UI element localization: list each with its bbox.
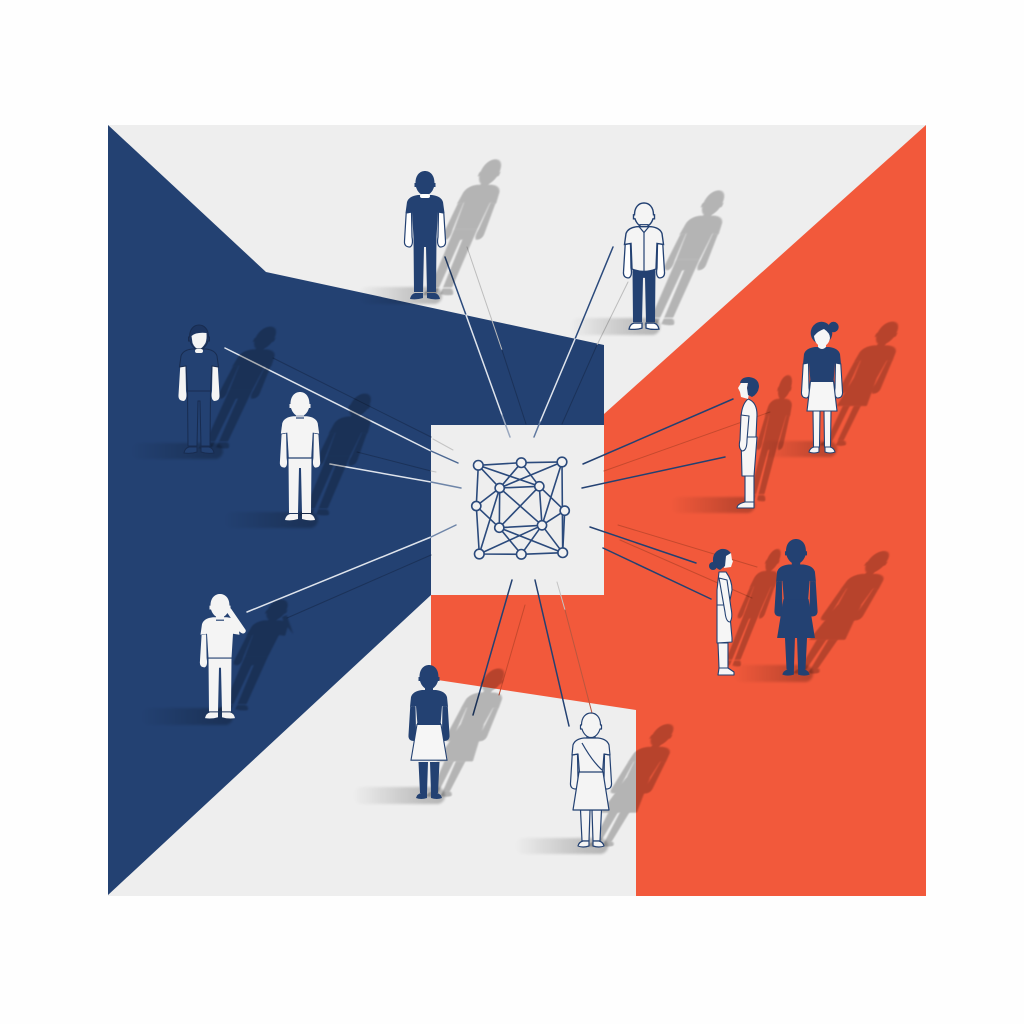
connection lines — [225, 247, 770, 726]
person — [570, 713, 612, 847]
figure: left upper man, navy on navy — [130, 325, 291, 459]
person — [279, 392, 321, 520]
cast shadow — [212, 600, 309, 710]
figure: bottom-right outlined woman — [515, 713, 689, 854]
panel: navy region — [108, 125, 604, 895]
figure: saluting white man — [140, 594, 309, 725]
cast shadow — [742, 375, 801, 501]
cast shadow — [638, 190, 739, 325]
cast shadow — [579, 724, 689, 847]
network icon — [472, 457, 569, 559]
person — [774, 539, 818, 676]
faint echo lines — [273, 247, 770, 713]
cast shadow — [417, 159, 516, 295]
right connector lines — [582, 399, 733, 599]
network nodes — [472, 457, 569, 559]
cast shadow — [785, 551, 905, 674]
network edges — [476, 462, 565, 554]
panel: light base square — [108, 125, 926, 896]
top connector lines — [445, 247, 613, 437]
left connector lines — [225, 348, 461, 612]
figure: right side-profile girl — [709, 549, 791, 675]
person — [737, 377, 759, 508]
figure: right upper woman with bun — [760, 322, 913, 457]
bottom connector lines — [473, 580, 569, 726]
figure: top-right outlined man — [570, 190, 739, 335]
panel: orange region — [431, 125, 926, 896]
cast shadow — [418, 668, 519, 797]
figure: top-left navy man — [358, 159, 516, 304]
person — [623, 203, 665, 329]
person — [199, 594, 243, 718]
figure: right side-profile boy — [670, 375, 801, 513]
cast shadow — [193, 327, 291, 448]
figure: left middle white man — [223, 392, 385, 528]
cast shadow — [812, 322, 913, 446]
person — [404, 171, 446, 299]
cast shadow — [293, 394, 385, 515]
person — [801, 322, 843, 453]
panel: central light square — [431, 425, 604, 595]
figure: right navy woman — [733, 539, 905, 682]
person — [709, 549, 734, 675]
figure: bottom-left woman with white skirt — [353, 665, 519, 804]
cast shadow — [717, 549, 791, 666]
person — [178, 325, 220, 453]
person — [408, 665, 450, 799]
